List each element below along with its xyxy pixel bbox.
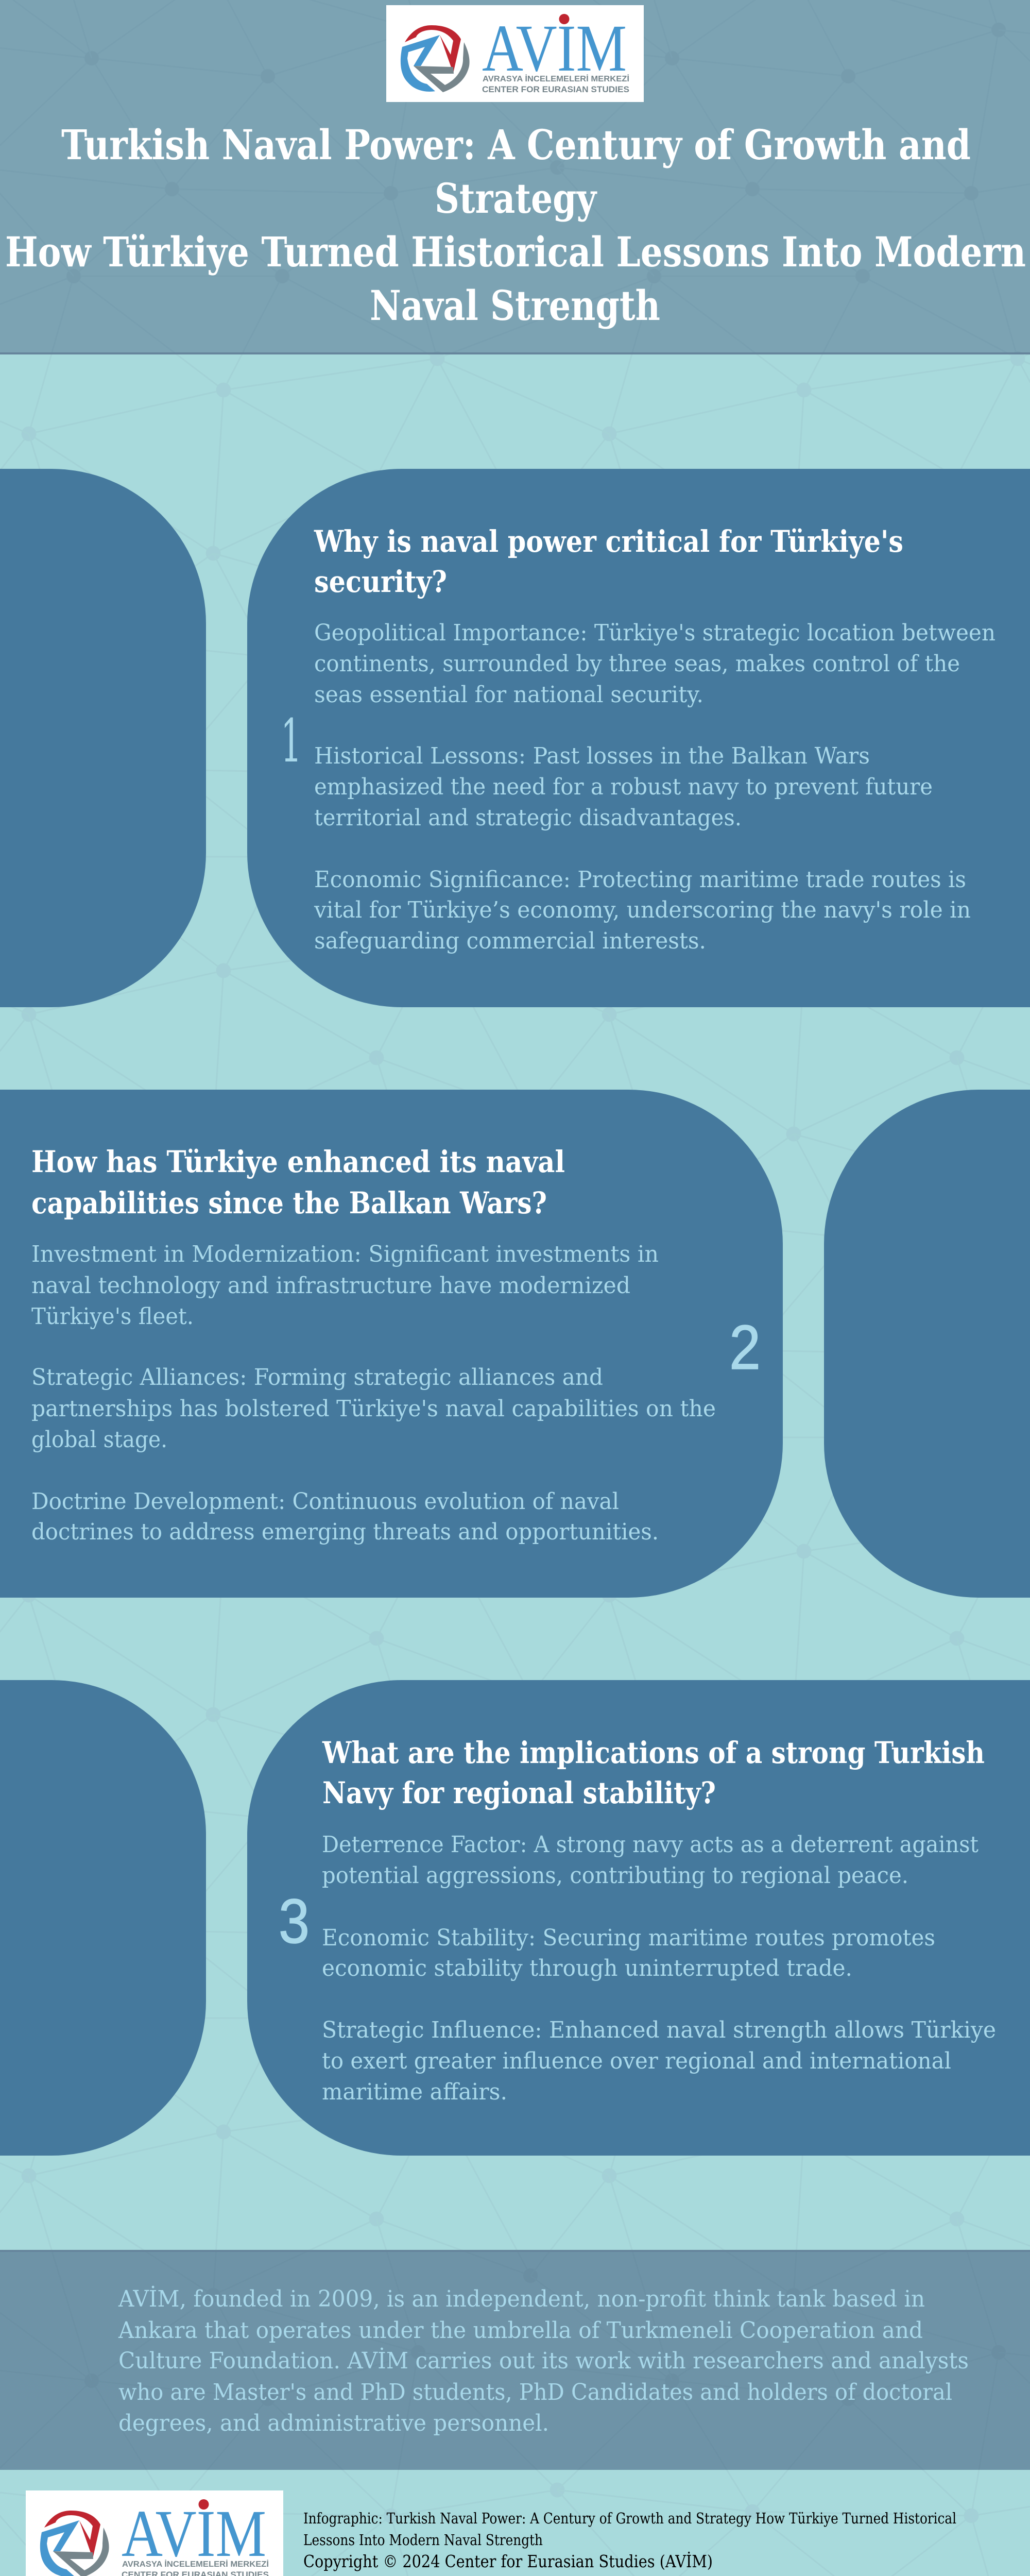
- header logo: [386, 5, 644, 102]
- panel 1: left block: [0, 469, 206, 1007]
- about AVİM text: Ankara that operates under the umbrella of Turkmeneli Cooperation and: [118, 2317, 923, 2344]
- footer credit text: [303, 2510, 956, 2571]
- panel 1 text: geopolitical importance: [314, 620, 995, 708]
- about AVİM text: AVİM, founded in 2009, is an independent, non-profit think tank based in: [118, 2285, 925, 2312]
- panel 1 text: geopolitical importance: Geopolitical Importance: Türkiye's strategic location between: [314, 620, 995, 646]
- panel 1 text: geopolitical importance: continents, surrounded by three seas, makes control of the: [314, 651, 960, 677]
- panel 3 text: economic stability: Economic Stability: Securing maritime routes promotes: [322, 1925, 935, 1951]
- panel 3 text: economic stability: economic stability through uninterrupted trade.: [322, 1955, 852, 1981]
- panel 1 text: economic significance: vital for Türkiye’s economy, underscoring the navy's role in: [314, 897, 971, 923]
- panel 2: right block: [824, 1090, 1030, 1598]
- panel 3: left block: [0, 1680, 206, 2156]
- panel 3: implications for regional stability: [247, 1680, 1030, 2156]
- panel 2 text: strategic alliances: [31, 1364, 716, 1453]
- panel 1 text: historical lessons: territorial and strategic disadvantages.: [314, 805, 742, 831]
- panel 1 text: geopolitical importance: seas essential for national security.: [314, 682, 703, 708]
- number 2: 2: [729, 1312, 761, 1382]
- panel 2 text: investment in modernization: naval technology and infrastructure have modernized: [31, 1273, 630, 1299]
- panel 1 text: historical lessons: [314, 743, 933, 831]
- about AVİM text: degrees, and administrative personnel.: [118, 2410, 549, 2436]
- title: Strategy: [435, 174, 597, 223]
- header logo: AVIM: [482, 11, 627, 86]
- header band: [0, 0, 1030, 354]
- footer logo: [26, 2490, 283, 2576]
- panel 2 text: doctrine development: [31, 1488, 659, 1545]
- footer logo: AVRASYA İNCELEMELERİ MERKEZİ: [122, 2560, 269, 2569]
- panel 2 text: investment in modernization: [31, 1241, 659, 1330]
- panel 3 text: economic stability: [322, 1925, 935, 1981]
- panel 2 text: doctrine development: Doctrine Development: Continuous evolution of naval: [31, 1488, 619, 1515]
- panel 3 text: strategic influence: [322, 2017, 996, 2105]
- panel 3 heading: [322, 1735, 985, 1810]
- panel 1 text: economic significance: [314, 867, 971, 954]
- panel 1 heading: Why is naval power critical for Türkiye's: [314, 524, 903, 559]
- about AVİM band: [0, 2250, 1030, 2470]
- panel 1 text: economic significance: safeguarding commercial interests.: [314, 928, 706, 954]
- about AVİM text: [118, 2285, 969, 2436]
- header logo: CENTER FOR EURASIAN STUDIES: [482, 84, 629, 94]
- panel 1: why naval power is critical: [247, 469, 1030, 1007]
- panel 3 text: strategic influence: Strategic Influence: Enhanced naval strength allows Türkiye: [322, 2017, 996, 2043]
- panel 3 text: strategic influence: to exert greater influence over regional and international: [322, 2048, 951, 2074]
- panel 1 text: historical lessons: emphasized the need for a robust navy to prevent future: [314, 774, 933, 800]
- panel 2 heading: [31, 1144, 565, 1221]
- number 3: 3: [279, 1886, 310, 1956]
- number 1: 1: [281, 707, 302, 776]
- panel 3 text: deterrence factor: Deterrence Factor: A strong navy acts as a deterrent against: [322, 1832, 978, 1858]
- title: Naval Strength: [370, 281, 660, 330]
- footer credit text: Lessons Into Modern Naval Strength: [303, 2531, 543, 2549]
- panel 2 text: strategic alliances: Strategic Alliances: Forming strategic alliances and: [31, 1364, 603, 1391]
- footer credit text: Copyright © 2024 Center for Eurasian Studies (AVİM): [303, 2551, 713, 2571]
- panel 2: how Türkiye enhanced capabilities: [0, 1090, 783, 1598]
- panel 3 text: strategic influence: maritime affairs.: [322, 2079, 507, 2105]
- header logo: AVRASYA İNCELEMELERİ MERKEZİ: [483, 75, 629, 83]
- panel 3 text: deterrence factor: [322, 1832, 978, 1889]
- panel 1 heading: security?: [314, 564, 447, 599]
- panel 3 heading: Navy for regional stability?: [322, 1775, 716, 1810]
- about AVİM text: who are Master's and PhD students, PhD Candidates and holders of doctoral: [118, 2379, 952, 2405]
- panel 2 heading: How has Türkiye enhanced its naval: [31, 1144, 565, 1179]
- panel 1 text: economic significance: Economic Significance: Protecting maritime trade routes is: [314, 867, 966, 893]
- panel 2 text: investment in modernization: Investment in Modernization: Significant investments in: [31, 1241, 659, 1267]
- panel 2 heading: capabilities since the Balkan Wars?: [31, 1185, 547, 1221]
- panel 1 text: historical lessons: Historical Lessons: Past losses in the Balkan Wars: [314, 743, 870, 769]
- about AVİM text: Culture Foundation. AVİM carries out its work with researchers and analysts: [118, 2347, 969, 2374]
- footer logo: AVIM: [122, 2497, 266, 2571]
- panel 1 heading: [314, 524, 903, 599]
- panel 2 text: investment in modernization: Türkiye's fleet.: [31, 1303, 194, 1330]
- panel 2 text: doctrine development: doctrines to address emerging threats and opportunities.: [31, 1519, 659, 1545]
- panel 2 text: strategic alliances: global stage.: [31, 1427, 167, 1453]
- panel 2 text: strategic alliances: partnerships has bolstered Türkiye's naval capabilities on the: [31, 1396, 716, 1422]
- title: [5, 121, 1026, 330]
- panel 3 text: deterrence factor: potential aggressions, contributing to regional peace.: [322, 1862, 908, 1889]
